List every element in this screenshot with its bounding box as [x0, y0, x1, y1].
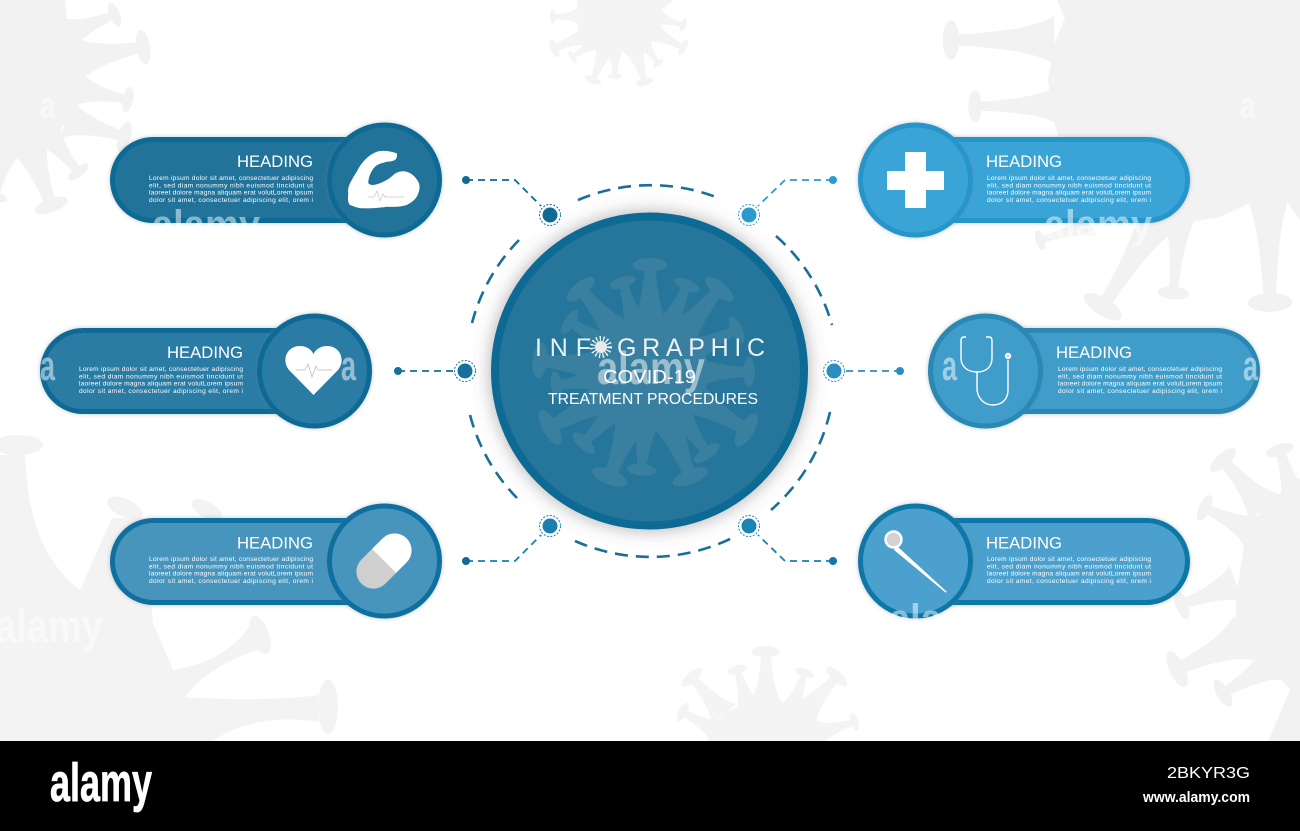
connector: bottom left: [462, 516, 560, 565]
panel: top left heading card: [112, 125, 440, 235]
body text: elit, sed diam nonummy nibh euismod tincidunt ut: [1058, 373, 1222, 380]
body text: [149, 556, 314, 585]
body text: laoreet dolore magna aliquam erat volutLorem ipsum: [987, 190, 1152, 197]
heading: HEADING: [986, 534, 1062, 552]
body text: elit, sed diam nonummy nibh euismod tincidunt ut: [149, 563, 313, 570]
body text: laoreet dolore magna aliquam erat volutLorem ipsum: [1058, 381, 1222, 388]
body text: elit, sed diam nonummy nibh euismod tincidunt ut: [149, 182, 313, 189]
body text: dolor sit amet, consectetuer adipiscing elit, orem i: [79, 388, 244, 395]
watermarks: alamy: [1044, 203, 1153, 247]
panel: middle left heading card: [42, 316, 370, 426]
body text: Lorem ipsum dolor sit amet, consectetuer adipiscing: [987, 175, 1151, 182]
background virus: bottom centre: [673, 646, 862, 744]
dashed ring around the central circle: [470, 185, 832, 557]
body text: elit, sed diam nonummy nibh euismod tincidunt ut: [987, 182, 1151, 189]
centre title: COVID-19: [603, 367, 696, 387]
centre title: TREATMENT PROCEDURES: [548, 391, 758, 408]
icon: heart: [285, 346, 342, 395]
connector: top right: [738, 176, 837, 226]
icon: stethoscope: [961, 337, 1010, 405]
watermarks: a: [40, 342, 55, 389]
body text: Lorem ipsum dolor sit amet, consectetuer adipiscing: [149, 556, 313, 563]
heading: HEADING: [167, 343, 243, 362]
panel: middle right heading card: [930, 316, 1258, 426]
watermarks: alamy: [889, 597, 998, 641]
heading: HEADING: [986, 152, 1062, 171]
watermarks: [0, 85, 1258, 652]
watermarks: a: [1240, 85, 1256, 127]
connector: middle right: [824, 360, 904, 382]
heading: HEADING: [1056, 343, 1132, 362]
body text: Lorem ipsum dolor sit amet, consectetuer adipiscing: [1058, 366, 1222, 373]
body text: dolor sit amet, consectetuer adipiscing elit, orem i: [149, 197, 314, 204]
body text: [1058, 366, 1223, 395]
body text: [79, 366, 244, 395]
panel: centre circle: [495, 216, 804, 526]
body text: dolor sit amet, consectetuer adipiscing elit, orem i: [987, 578, 1152, 585]
website: www.alamy.com: [1142, 789, 1250, 806]
body text: [987, 556, 1152, 585]
watermarks: a: [1243, 342, 1258, 389]
body text: [987, 175, 1152, 204]
icon: medical cross: [887, 152, 944, 208]
background virus: top right: [943, 0, 1300, 328]
heading: HEADING: [237, 152, 313, 171]
body text: dolor sit amet, consectetuer adipiscing elit, orem i: [149, 578, 314, 585]
body text: Lorem ipsum dolor sit amet, consectetuer adipiscing: [987, 556, 1151, 563]
connector: top left: [462, 176, 560, 226]
body text: dolor sit amet, consectetuer adipiscing elit, orem i: [987, 197, 1152, 204]
panel: top right heading card: [860, 125, 1188, 235]
body text: laoreet dolore magna aliquam erat volutLorem ipsum: [149, 190, 314, 197]
watermarks: a: [341, 342, 356, 389]
body text: Lorem ipsum dolor sit amet, consectetuer adipiscing: [79, 366, 243, 373]
body text: laoreet dolore magna aliquam erat volutLorem ipsum: [149, 571, 314, 578]
footer bar: [0, 741, 1300, 831]
watermarks: a: [40, 85, 56, 127]
panel: bottom left heading card: [112, 506, 440, 616]
body text: Lorem ipsum dolor sit amet, consectetuer adipiscing: [149, 175, 313, 182]
background virus: top left: [0, 0, 154, 219]
panel: bottom right heading card: [860, 506, 1188, 616]
body text: elit, sed diam nonummy nibh euismod tincidunt ut: [987, 563, 1151, 570]
centre title: GRAPHIC: [617, 334, 765, 362]
background virus: bottom left: [0, 435, 338, 741]
centre title: [535, 334, 765, 408]
body text: dolor sit amet, consectetuer adipiscing elit, orem i: [1058, 388, 1223, 395]
icon: flexed arm: [348, 151, 420, 208]
icon: capsule: [349, 526, 419, 596]
connector: bottom right: [738, 516, 837, 565]
connector: middle left: [394, 360, 476, 382]
body text: laoreet dolore magna aliquam erat volutLorem ipsum: [987, 571, 1152, 578]
image id: 2BKYR3G: [1167, 765, 1250, 782]
centre title: INF: [535, 334, 591, 362]
icon: dental mirror: [886, 532, 947, 592]
watermarks: alamy: [597, 342, 705, 394]
body text: elit, sed diam nonummy nibh euismod tincidunt ut: [79, 373, 243, 380]
watermarks: a: [942, 342, 957, 389]
centre virus emblem: [530, 258, 765, 493]
body text: laoreet dolore magna aliquam erat volutLorem ipsum: [79, 381, 244, 388]
heading: HEADING: [237, 534, 313, 552]
background virus: right: [1160, 439, 1300, 741]
watermarks: alamy: [152, 203, 261, 247]
body text: [149, 175, 314, 204]
footer logo: alamy: [50, 753, 152, 813]
background virus: top centre: [546, 0, 691, 89]
